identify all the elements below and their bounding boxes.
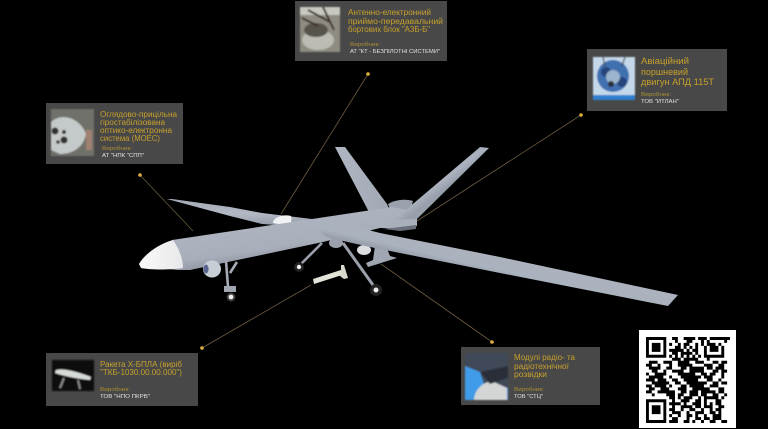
drone rear underside: [384, 225, 416, 231]
heading: radio module: радіотехнічної: [514, 362, 570, 371]
drone engine pod: [357, 245, 371, 255]
drone illustration: [139, 147, 678, 306]
heading: missile: [100, 360, 183, 377]
drone right main gear: [343, 243, 382, 296]
heading: radio module: Модулі радіо- та: [514, 353, 576, 362]
maker: antenna unit: Виробник:: [350, 42, 380, 48]
drone nose gear: [224, 261, 237, 302]
maker: radio module: ТОВ "СТЦ": [514, 394, 543, 400]
leader line: engine: [417, 113, 583, 221]
drone engine cowling: [388, 200, 413, 216]
maker: radio module: [514, 387, 544, 400]
panel: engine: [587, 49, 727, 111]
drone nose cone: [139, 240, 183, 270]
heading: optical system: система (МОЕС): [100, 134, 160, 143]
drone sensor turret: [203, 260, 221, 278]
maker: missile: Виробник:: [100, 387, 130, 393]
maker: antenna unit: [350, 42, 440, 55]
panel: radio module: [461, 347, 600, 405]
drone missile: [313, 265, 348, 284]
maker: engine: Виробник:: [641, 92, 671, 98]
panel: missile: [46, 353, 198, 406]
heading: engine: [641, 56, 714, 88]
heading: radio module: розвідки: [514, 370, 547, 379]
maker: missile: ТОВ "НПО ПКРВ": [100, 394, 150, 400]
heading: optical system: оптико-електронна: [100, 126, 173, 135]
heading: antenna unit: приймо-передавальний: [348, 17, 443, 26]
panel: optical system: [46, 103, 183, 164]
drone radio module pod: [366, 246, 397, 267]
heading: antenna unit: бортових блок "АЗБ-Б": [348, 25, 430, 34]
leader line: radio module: [381, 264, 494, 344]
maker: optical system: Виробник:: [102, 146, 132, 152]
heading: engine: Авіаційний: [641, 56, 689, 67]
heading: missile: "ТКБ-1030.00.00.000"): [100, 368, 182, 377]
drone far wing: [167, 199, 325, 226]
heading: antenna unit: Антенно-електронний: [348, 8, 431, 17]
leader line: antenna unit: [281, 72, 370, 214]
heading: optical system: гіростабілізована: [100, 118, 166, 127]
maker: antenna unit: АТ "КТ - БЕЗПІЛОТНІ СИСТЕМИ": [350, 49, 440, 55]
thumbnail: missile: [52, 360, 94, 391]
drone belly pod: [329, 238, 343, 248]
thumbnail: radio module: [465, 353, 508, 400]
leader line: optical system: [138, 173, 193, 231]
heading: engine: двигун АПД 115Т: [641, 77, 714, 88]
heading: engine: поршневий: [641, 67, 688, 78]
thumbnail: antenna unit: [300, 7, 340, 52]
drone tail fin right: [394, 147, 489, 220]
drone left main gear: [294, 243, 322, 272]
drone fuselage: [160, 207, 417, 270]
panel: antenna unit: [295, 1, 447, 61]
maker: engine: [641, 92, 679, 105]
thumbnail: engine: [593, 57, 635, 100]
heading: optical system: Оглядово-прицільна: [100, 110, 178, 119]
drone antenna dome: [273, 215, 291, 225]
drone near wing: [321, 221, 678, 306]
maker: missile: [100, 387, 150, 400]
drone tail fin left: [335, 147, 392, 215]
heading: radio module: [514, 353, 576, 379]
heading: antenna unit: [348, 8, 443, 34]
heading: missile: Ракета Х-БПЛА (виріб: [100, 360, 183, 369]
heading: optical system: [100, 110, 178, 143]
maker: optical system: АТ "НПК "СПП": [102, 153, 144, 159]
maker: radio module: Виробник:: [514, 387, 544, 393]
QR code: [639, 330, 736, 428]
leader line: missile: [200, 285, 311, 350]
thumbnail: optical system: [51, 109, 94, 156]
maker: engine: ТОВ "ИТЛАН": [641, 99, 679, 105]
maker: optical system: [102, 146, 144, 159]
